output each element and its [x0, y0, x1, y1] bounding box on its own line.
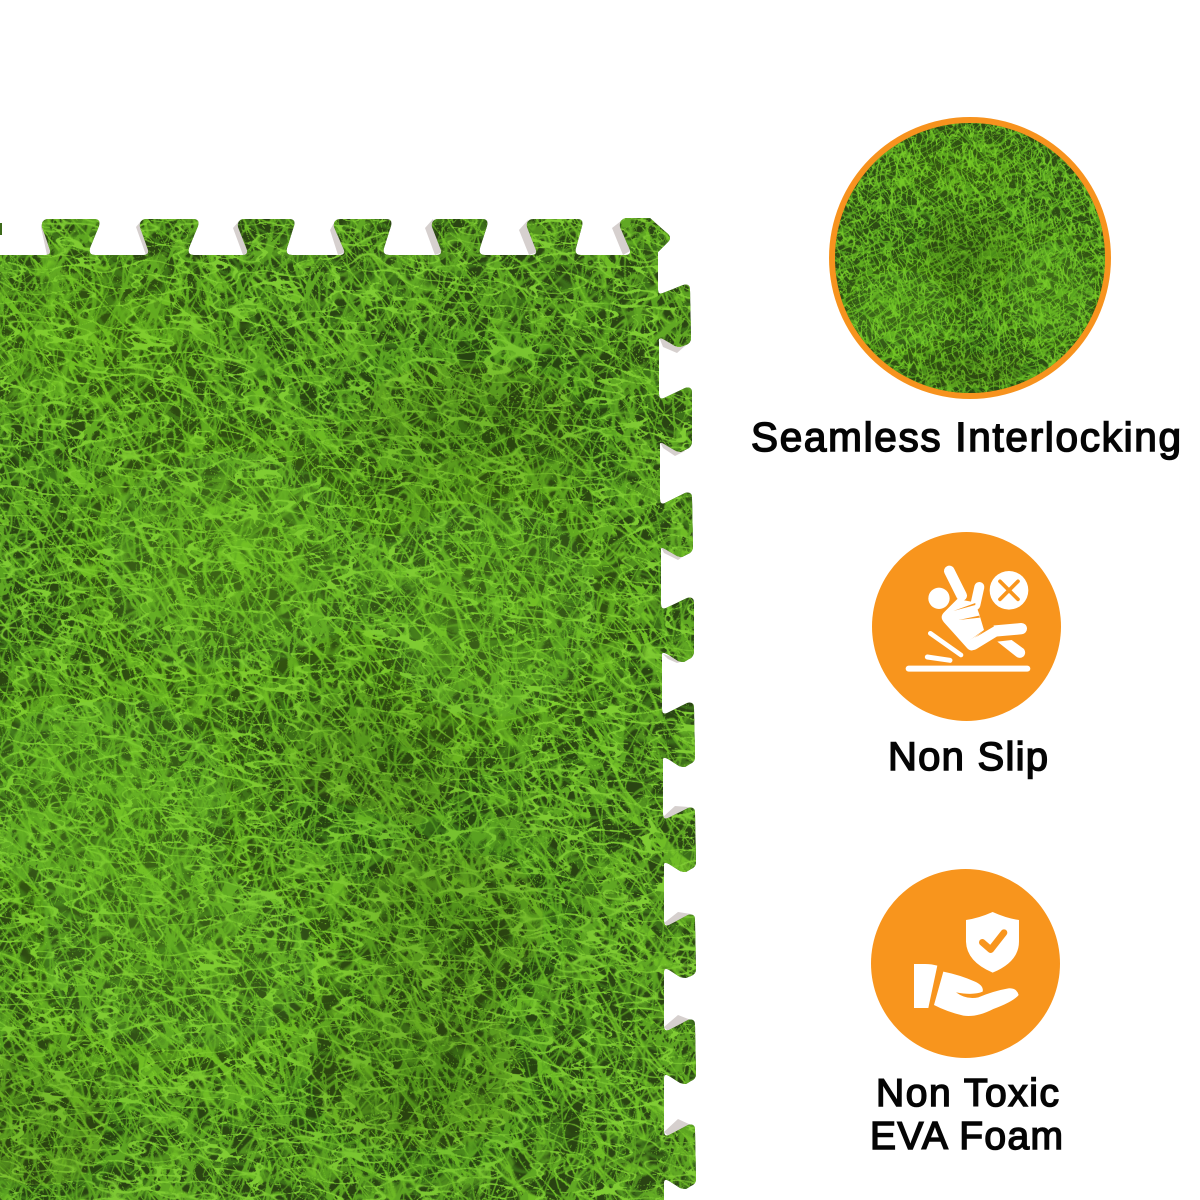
- panel: grass foam mat: [0, 210, 700, 1200]
- grass swatch circle with orange ring: [829, 117, 1111, 399]
- feature: seamless interlocking: [751, 117, 1181, 460]
- feature: non slip: [872, 532, 1061, 779]
- icon: hand holding shield: [871, 869, 1060, 1058]
- label: Non Toxic EVA Foam: EVA Foam: [870, 1115, 1063, 1158]
- label: Seamless Interlocking: Seamless Interlocking: [751, 414, 1181, 460]
- small neighbouring tab: [0, 223, 2, 235]
- icon: slipping person: [872, 532, 1061, 721]
- label: Non Toxic EVA Foam: [870, 1072, 1063, 1158]
- grass texture surface: [0, 210, 700, 1200]
- label: Non Slip: Non Slip: [888, 735, 1048, 779]
- foam side edges: [41, 219, 691, 1137]
- label: Non Toxic EVA Foam: Non Toxic: [876, 1072, 1059, 1115]
- light and shadow patches: [0, 270, 600, 1190]
- feature: non toxic EVA foam: [870, 869, 1063, 1158]
